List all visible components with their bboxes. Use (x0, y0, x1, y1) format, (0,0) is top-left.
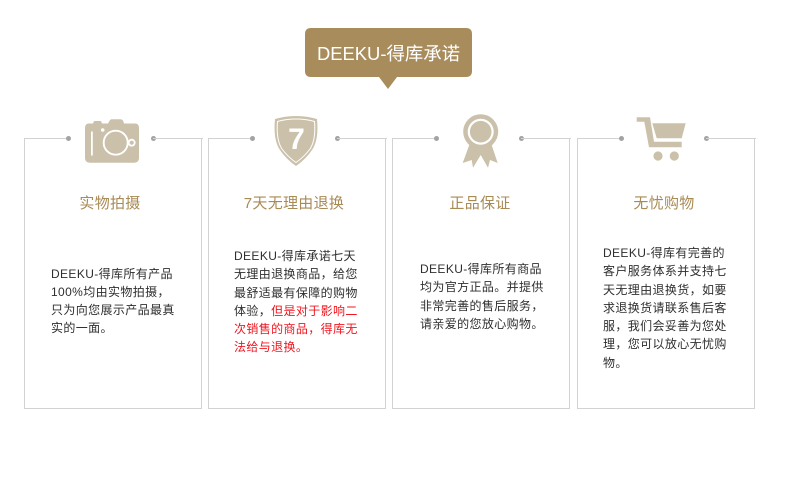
text: 7天无理由退换 description: 体验，但是对于影响二 (234, 304, 358, 318)
text: 无忧购物 description (603, 246, 727, 370)
text: 实物拍摄 description: 实的一面。 (51, 321, 113, 335)
heading: 无忧购物: 无忧购物 (633, 195, 695, 212)
icon: rosette (462, 114, 498, 168)
text: 正品保证 description: 请亲爱的您放心购物。 (420, 317, 544, 331)
text: 正品保证 description: DEEKU-得库所有商品 (420, 262, 542, 276)
text: 7天无理由退换 description: 无理由退换商品，给您 (234, 267, 358, 281)
panel: 无忧购物 (577, 138, 755, 409)
text: 7天无理由退换 description: DEEKU-得库承诺七天 (234, 249, 356, 263)
panel: 7天无理由退换 (208, 138, 386, 409)
text: 7天无理由退换 description: 最舒适最有保障的购物 (234, 286, 358, 300)
heading: 实物拍摄: 实物拍摄 (79, 195, 141, 212)
text: 实物拍摄 description: 只为向您展示产品最真 (51, 303, 175, 317)
text: 无忧购物 description: 天无理由退换货，如要 (603, 283, 727, 297)
panel: 正品保证 (392, 138, 570, 409)
title badge: DEEKU-得库承诺 (317, 43, 460, 64)
text: 正品保证 description: 非常完善的售后服务， (420, 299, 544, 313)
text: 7天无理由退换 description (234, 249, 358, 354)
text: 无忧购物 description: 求退换货请联系售后客 (603, 301, 727, 315)
icon: camera (85, 119, 139, 163)
text: 正品保证 description: 均为官方正品。并提供 (420, 280, 544, 294)
text: 7天无理由退换 description: 法给与退换。 (234, 340, 308, 354)
icon: shield 7: 7 (288, 123, 305, 156)
heading: 正品保证: 正品保证 (449, 195, 511, 212)
heading: 7天无理由退换: 7天无理由退换 (244, 195, 344, 212)
text: 无忧购物 description: 客户服务体系并支持七 (603, 264, 727, 278)
icon: shopping cart (636, 117, 686, 161)
text: 无忧购物 description: 物。 (603, 356, 628, 370)
text: 7天无理由退换 description: 次销售的商品，得库无 (234, 322, 358, 336)
icon: shield 7 (274, 116, 318, 166)
text: 实物拍摄 description: 100%均由实物拍摄， (51, 285, 170, 299)
text: 无忧购物 description: 理，您可以放心无忧购 (603, 337, 727, 351)
text: 无忧购物 description: 服，我们会妥善为您处 (603, 319, 727, 333)
text: 无忧购物 description: DEEKU-得库有完善的 (603, 246, 725, 260)
text: 实物拍摄 description: DEEKU-得库所有产品 (51, 266, 173, 280)
text: 正品保证 description (420, 262, 544, 331)
title badge (305, 28, 472, 89)
panel: 实物拍摄 (24, 138, 202, 409)
text: 实物拍摄 description (51, 266, 175, 335)
